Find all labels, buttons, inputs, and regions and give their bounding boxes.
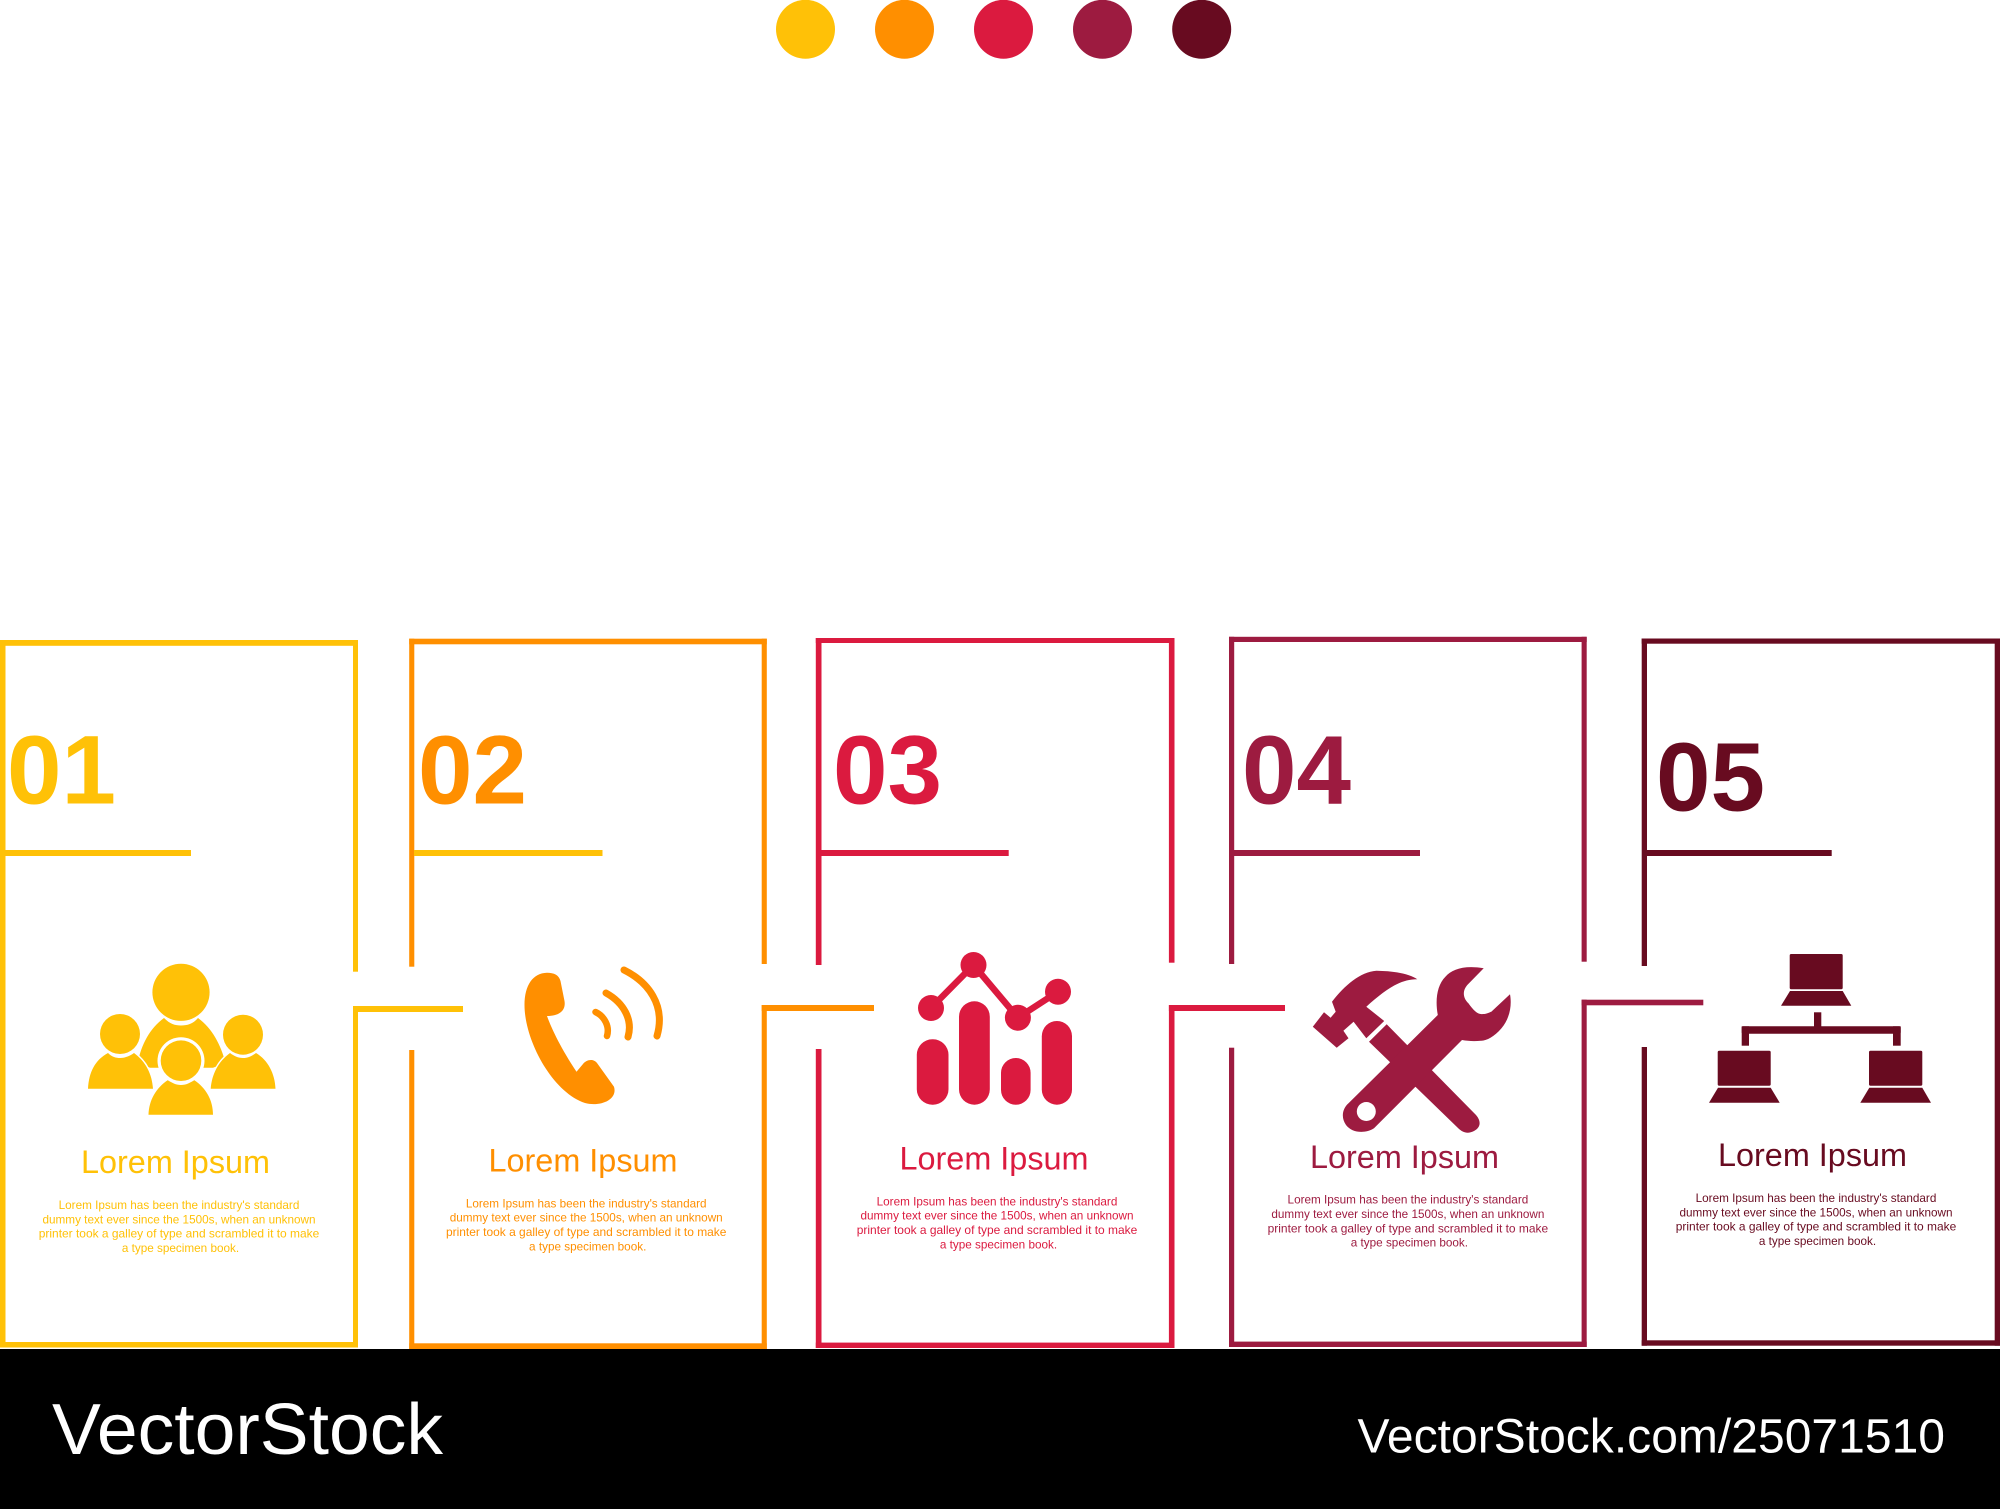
heading 3: Lorem Ipsum bbox=[900, 1140, 1088, 1176]
body text 4: Lorem Ipsum has been the industry's standard bbox=[1288, 1193, 1528, 1207]
body text 5: dummy text ever since the 1500s, when an unknown bbox=[1680, 1205, 1952, 1219]
body text 2: Lorem Ipsum has been the industry's standard bbox=[466, 1196, 707, 1210]
icon: bar and line chart bbox=[917, 952, 1072, 1105]
body text 1 bbox=[39, 1198, 320, 1255]
icon: telephone with signal bbox=[524, 970, 659, 1104]
body text 4: printer took a galley of type and scrambled it to make bbox=[1268, 1221, 1548, 1235]
panel 3 frame and connector bbox=[816, 638, 1285, 1348]
body text 2: a type specimen book. bbox=[529, 1239, 646, 1253]
body text 4: dummy text ever since the 1500s, when an unknown bbox=[1271, 1207, 1544, 1221]
panel 1 frame and connector bbox=[0, 640, 463, 1348]
body text 3: dummy text ever since the 1500s, when an unknown bbox=[860, 1209, 1134, 1223]
body text 1: printer took a galley of type and scrambled it to make bbox=[39, 1227, 320, 1241]
panel 3 bbox=[816, 638, 1285, 1348]
panel 5 bbox=[1642, 638, 2000, 1346]
panel 4 frame and connector bbox=[1229, 637, 1703, 1347]
heading 5: Lorem Ipsum bbox=[1718, 1137, 1907, 1173]
body text 5 bbox=[1676, 1191, 1957, 1248]
body text 1: a type specimen book. bbox=[122, 1241, 239, 1255]
body text 3: printer took a galley of type and scrambled it to make bbox=[857, 1223, 1138, 1237]
hammer handle bbox=[1369, 1024, 1480, 1133]
panel 4 bbox=[1229, 637, 1703, 1347]
body text 4: a type specimen book. bbox=[1351, 1236, 1468, 1250]
body text 3: a type specimen book. bbox=[940, 1237, 1057, 1251]
body text 2: dummy text ever since the 1500s, when an unknown bbox=[450, 1211, 723, 1225]
colour legend dots bbox=[776, 0, 1231, 59]
number 05: 05 bbox=[1656, 722, 1765, 832]
body text 5: a type specimen book. bbox=[1759, 1234, 1876, 1248]
panel 2 bbox=[409, 639, 874, 1349]
body text 3: Lorem Ipsum has been the industry's standard bbox=[877, 1194, 1117, 1208]
hammer head bbox=[1313, 971, 1417, 1048]
panel 5 frame bbox=[1642, 638, 2000, 1346]
number 03: 03 bbox=[833, 716, 942, 824]
body text 2: printer took a galley of type and scrambled it to make bbox=[446, 1225, 727, 1239]
number 02: 02 bbox=[418, 716, 527, 824]
panel 2 divider bbox=[414, 850, 602, 856]
body text 5: Lorem Ipsum has been the industry's standard bbox=[1696, 1191, 1936, 1205]
icon: laptop network bbox=[1709, 954, 1931, 1103]
body text 3 bbox=[857, 1194, 1138, 1251]
panel 2 frame and connector bbox=[409, 639, 874, 1349]
footer url text: VectorStock.com/25071510 bbox=[1358, 1409, 1945, 1463]
footer bar bbox=[0, 1349, 2000, 1509]
panel 1 bbox=[0, 640, 463, 1348]
footer logo text: VectorStock bbox=[52, 1390, 444, 1470]
icon: crossed hammer and wrench bbox=[1313, 967, 1511, 1133]
body text 5: printer took a galley of type and scrambled it to make bbox=[1676, 1220, 1957, 1234]
icon: people group bbox=[88, 964, 276, 1115]
body text 2 bbox=[446, 1196, 727, 1253]
heading 1: Lorem Ipsum bbox=[81, 1144, 270, 1180]
heading 4: Lorem Ipsum bbox=[1310, 1139, 1499, 1175]
body text 1: Lorem Ipsum has been the industry's standard bbox=[59, 1198, 299, 1212]
body text 1: dummy text ever since the 1500s, when an unknown bbox=[42, 1212, 316, 1226]
number 01: 01 bbox=[7, 716, 116, 824]
number 04: 04 bbox=[1242, 716, 1351, 824]
body text 4 bbox=[1268, 1193, 1548, 1250]
wrench bbox=[1343, 967, 1511, 1132]
heading 2: Lorem Ipsum bbox=[488, 1142, 678, 1178]
